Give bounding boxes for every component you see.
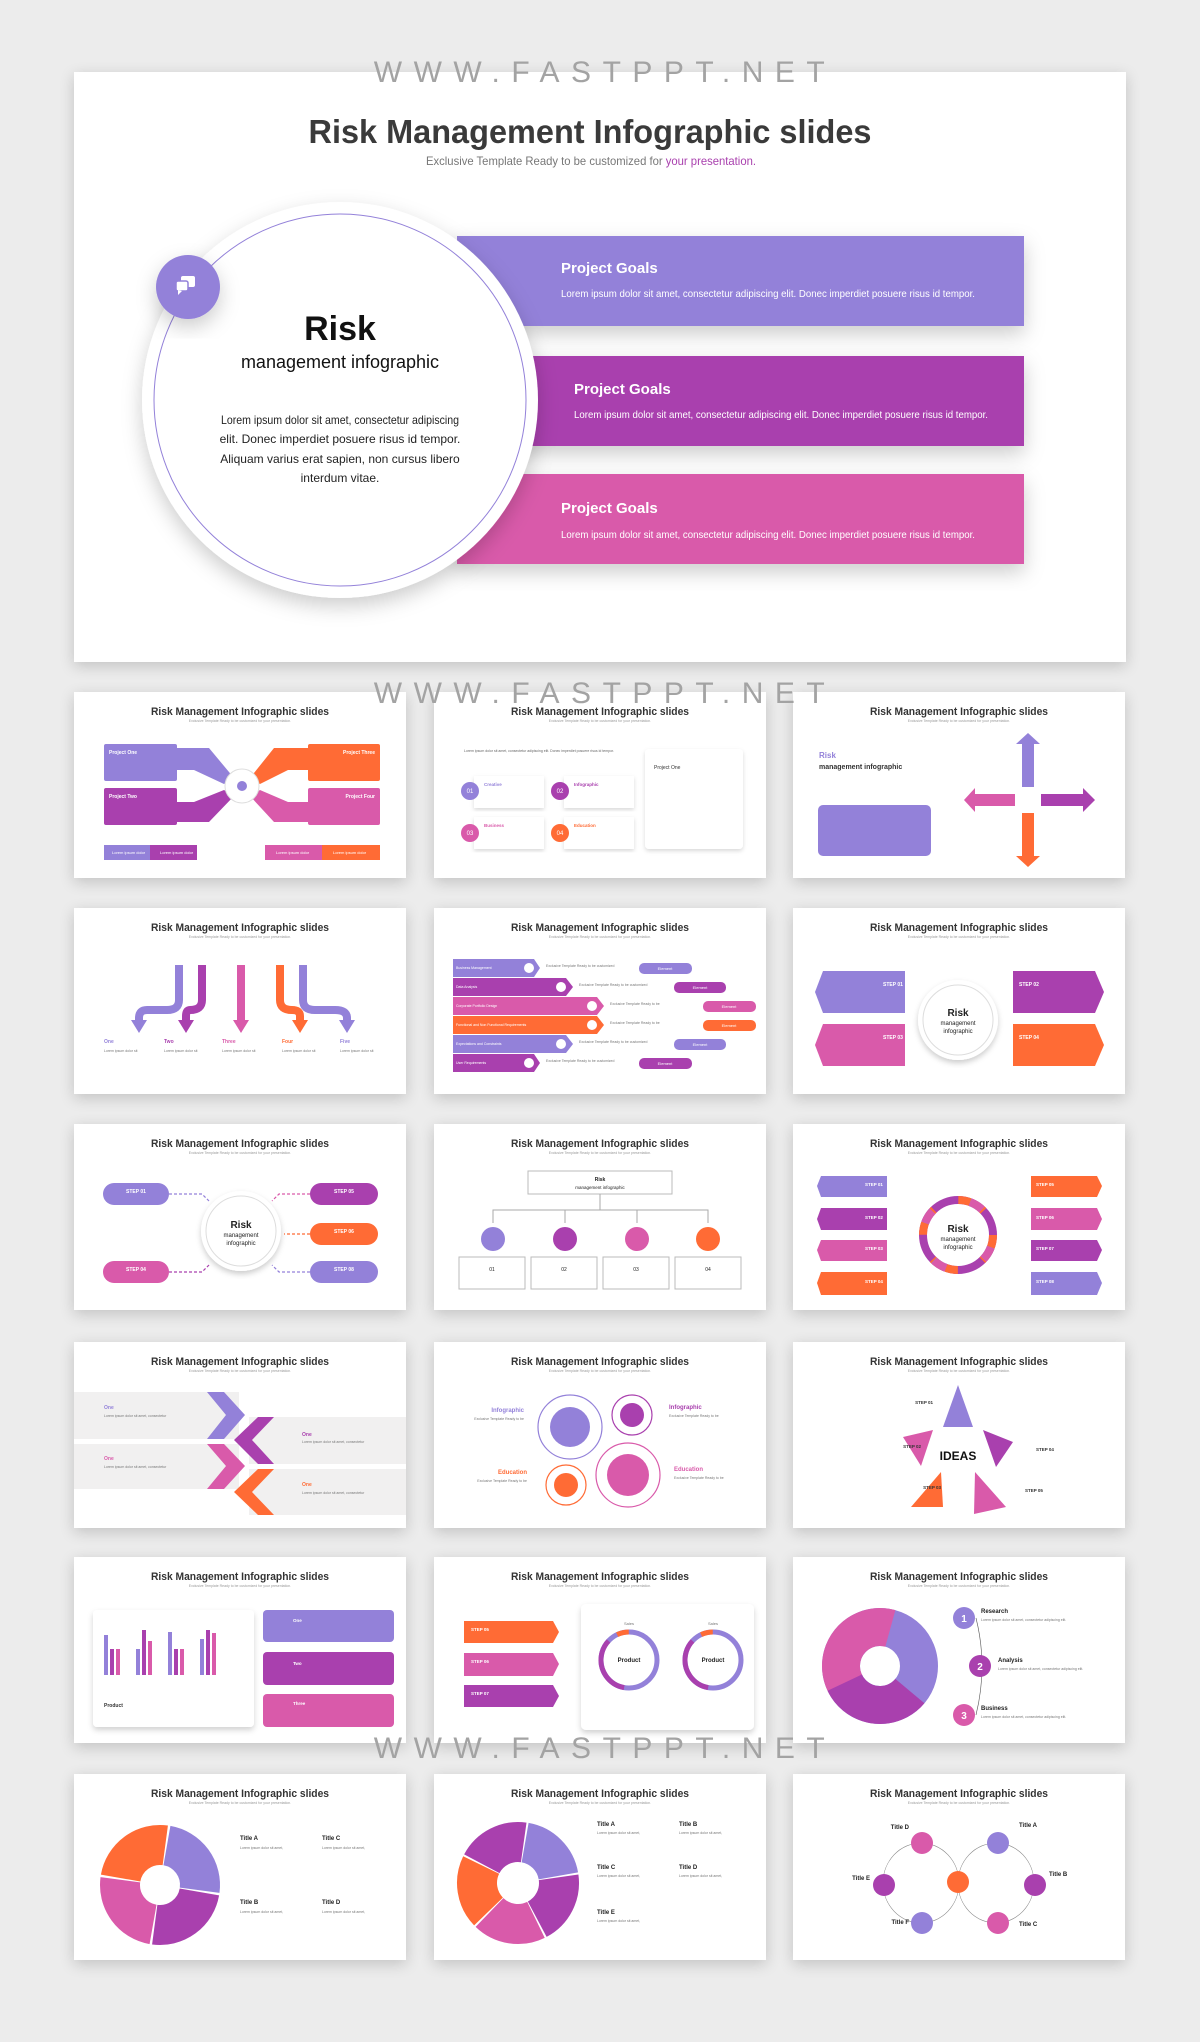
thumb 2: creative cards: Exclusive Template Ready to be customized for your presentation. — [549, 719, 651, 723]
thumb 4: ribbon arrows: Three — [222, 1039, 236, 1045]
thumb 13: bar chart: Risk Management Infographic slides — [151, 1571, 329, 1583]
thumb 18: figure-eight nodes: Title D — [891, 1825, 910, 1831]
central circle: management infographic — [241, 352, 439, 372]
thumb 7: steps pills around circle: STEP 01 — [126, 1189, 146, 1195]
bar: project goals 3: Lorem ipsum dolor sit amet, consectetur adipiscing elit. Donec imperdiet posuere risus id tempor. — [561, 529, 975, 541]
thumb 18: figure-eight nodes — [793, 1774, 1125, 1960]
thumb 3: cross arrows — [793, 692, 1125, 878]
thumb 14: donuts product: STEP 06 — [471, 1659, 489, 1664]
bar: project goals 2: Lorem ipsum dolor sit amet, consectetur adipiscing elit. Donec imperdiet posuere risus id tempor. — [574, 409, 988, 421]
thumb 2: creative cards: Risk Management Infographic slides — [511, 706, 689, 718]
bar: project goals 2 — [457, 356, 1024, 446]
central circle: Lorem ipsum dolor sit amet, consectetur adipiscing — [221, 413, 459, 427]
thumb 16: 4-segment cycle: Title C — [322, 1836, 341, 1842]
thumb 12: ideas: STEP 01 — [915, 1400, 933, 1405]
thumb 11: circles infographic education: Education — [498, 1470, 527, 1476]
thumb 4: ribbon arrows: Lorem ipsum dolor sit — [222, 1049, 255, 1053]
thumb 5: horizontal bars: Expectations and Constraints — [456, 1042, 502, 1046]
thumb 10: chevrons with bands: One — [104, 1456, 114, 1462]
thumb 14: donuts product: Sales — [708, 1621, 718, 1626]
thumb 5: horizontal bars — [434, 908, 766, 1094]
thumb 4: ribbon arrows: One — [104, 1039, 114, 1045]
thumb 1: project one-four: Risk Management Infographic slides — [151, 706, 329, 718]
central circle: elit. Donec imperdiet posuere risus id tempor. — [220, 432, 460, 446]
thumb 14: donuts product: STEP 05 — [471, 1627, 489, 1632]
thumb 13: bar chart: Product — [104, 1703, 123, 1709]
thumb 1: project one-four: Lorem ipsum dolor — [112, 850, 146, 855]
thumb 11: circles infographic education: Exclusive Template Ready to be — [669, 1414, 719, 1418]
thumb 2: creative cards: Creative — [484, 782, 502, 787]
bar: project goals 3: Project Goals — [561, 500, 658, 517]
bar: project goals 3 — [457, 474, 1024, 564]
thumb 7: steps pills around circle: management — [223, 1233, 259, 1239]
thumb 14: donuts product: Product — [702, 1658, 724, 1664]
thumb 5: horizontal bars: Element — [658, 1061, 673, 1066]
thumb 12: ideas: Exclusive Template Ready to be customized for your presentation. — [908, 1369, 1010, 1373]
thumb 7: steps pills around circle: STEP 04 — [126, 1267, 146, 1273]
thumb 11: circles infographic education: Education — [674, 1467, 703, 1473]
thumb 14: donuts product: Exclusive Template Ready to be customized for your presentation. — [549, 1584, 651, 1588]
thumb 3: cross arrows: Risk — [819, 751, 836, 760]
main slide — [74, 72, 1126, 662]
thumb 4: ribbon arrows — [74, 908, 406, 1094]
thumb 7: steps pills around circle: Risk — [230, 1220, 252, 1231]
thumb 9: ring with 8 steps: STEP 07 — [1036, 1246, 1054, 1251]
thumb 1: project one-four: Exclusive Template Ready to be customized for your presentation. — [189, 719, 291, 723]
thumb 6: steps hexagons: Risk — [947, 1008, 969, 1019]
thumb 14: donuts product: Risk Management Infographic slides — [511, 1571, 689, 1583]
thumb 9: ring with 8 steps: STEP 04 — [865, 1279, 883, 1284]
thumb 9: ring with 8 steps: STEP 03 — [865, 1246, 883, 1251]
thumb 10: chevrons with bands: Lorem ipsum dolor sit amet, consectetur — [302, 1491, 365, 1495]
icon: chat bubbles — [156, 255, 220, 319]
thumb 8: tree chart: Risk — [595, 1177, 605, 1183]
thumb 2: creative cards: Project One — [654, 765, 681, 771]
thumb 6: steps hexagons: STEP 01 — [883, 982, 903, 988]
thumb 9: ring with 8 steps: Risk Management Infographic slides — [870, 1138, 1048, 1150]
thumb 12: ideas: Risk Management Infographic slides — [870, 1356, 1048, 1368]
thumb 11: circles infographic education: Exclusive Template Ready to be — [477, 1479, 527, 1483]
thumb 11: circles infographic education — [434, 1342, 766, 1528]
thumb 3: cross arrows: Risk Management Infographic slides — [870, 706, 1048, 718]
thumb 2: creative cards: 01 — [467, 789, 474, 795]
thumb 2: creative cards — [434, 692, 766, 878]
central circle: Aliquam varius erat sapien, non cursus libero — [220, 452, 460, 466]
thumb 13: bar chart: Three — [293, 1701, 306, 1706]
thumb 10: chevrons with bands: One — [302, 1482, 312, 1488]
thumb 11: circles infographic education: Infographic — [669, 1405, 702, 1411]
thumb 17: 5-segment cycle: Exclusive Template Ready to be customized for your presentation. — [549, 1801, 651, 1805]
thumb 15: cycle research analysis business: Lorem ipsum dolor sit amet, consectetur adipiscing elit. — [981, 1618, 1066, 1622]
thumb 9: ring with 8 steps: STEP 08 — [1036, 1279, 1054, 1284]
thumb 17: 5-segment cycle: Title E — [597, 1910, 615, 1916]
thumb 2: creative cards: 04 — [557, 831, 564, 837]
thumb 12: ideas: STEP 03 — [923, 1485, 941, 1490]
thumb 13: bar chart: One — [293, 1618, 302, 1623]
thumb 8: tree chart: 02 — [561, 1267, 567, 1273]
thumb 17: 5-segment cycle: Lorem ipsum dolor sit amet, — [679, 1874, 722, 1878]
thumb 11: circles infographic education: Risk Management Infographic slides — [511, 1356, 689, 1368]
thumb 5: horizontal bars: Element — [693, 985, 708, 990]
thumb 8: tree chart: Risk Management Infographic slides — [511, 1138, 689, 1150]
thumb 10: chevrons with bands — [74, 1342, 406, 1528]
thumb 14: donuts product — [434, 1557, 766, 1743]
thumb 9: ring with 8 steps: management — [940, 1237, 976, 1243]
thumb 10: chevrons with bands: Exclusive Template Ready to be customized for your presentation. — [189, 1369, 291, 1373]
thumb 12: ideas: IDEAS — [940, 1449, 976, 1463]
central circle: interdum vitae. — [301, 471, 379, 485]
thumb 5: horizontal bars: Business Management — [456, 966, 492, 970]
thumb 4: ribbon arrows: Lorem ipsum dolor sit — [282, 1049, 315, 1053]
thumb 16: 4-segment cycle: Risk Management Infographic slides — [151, 1788, 329, 1800]
thumb 10: chevrons with bands: Risk Management Infographic slides — [151, 1356, 329, 1368]
thumb 6: steps hexagons: STEP 04 — [1019, 1035, 1039, 1041]
thumb 5: horizontal bars: User Requirements — [456, 1061, 486, 1065]
thumb 6: steps hexagons: STEP 03 — [883, 1035, 903, 1041]
title: Risk Management Infographic slides — [308, 113, 872, 150]
thumb 15: cycle research analysis business: 2 — [977, 1662, 983, 1673]
thumb 10: chevrons with bands: One — [104, 1405, 114, 1411]
thumb 6: steps hexagons: STEP 02 — [1019, 982, 1039, 988]
thumb 10: chevrons with bands: Lorem ipsum dolor sit amet, consectetur — [302, 1440, 365, 1444]
watermark bottom: WWW.FASTPPT.NET — [374, 1732, 836, 1765]
thumb 16: 4-segment cycle: Title B — [240, 1900, 259, 1906]
thumb 7: steps pills around circle: STEP 05 — [334, 1189, 354, 1195]
watermark top: WWW.FASTPPT.NET — [374, 56, 836, 89]
bar: project goals 1: Lorem ipsum dolor sit amet, consectetur adipiscing elit. Donec imperdiet posuere risus id tempor. — [561, 288, 975, 300]
thumb 18: figure-eight nodes: Title B — [1049, 1872, 1068, 1878]
thumb 1: project one-four: Lorem ipsum dolor — [160, 850, 194, 855]
thumb 5: horizontal bars: Exclusive Template Ready to be — [610, 1021, 660, 1025]
thumb 4: ribbon arrows: Lorem ipsum dolor sit — [104, 1049, 137, 1053]
thumb 1: project one-four — [74, 692, 406, 878]
thumb 9: ring with 8 steps: STEP 02 — [865, 1215, 883, 1220]
thumb 5: horizontal bars: Data Analysis — [456, 985, 477, 989]
thumb 8: tree chart: management infographic — [575, 1185, 626, 1190]
thumb 7: steps pills around circle: infographic — [226, 1241, 256, 1247]
thumb 4: ribbon arrows: Lorem ipsum dolor sit — [164, 1049, 197, 1053]
thumb 17: 5-segment cycle — [434, 1774, 766, 1960]
thumb 15: cycle research analysis business — [793, 1557, 1125, 1743]
thumb 16: 4-segment cycle: Title A — [240, 1836, 259, 1842]
thumb 9: ring with 8 steps: infographic — [943, 1245, 973, 1251]
thumb 7: steps pills around circle — [74, 1124, 406, 1310]
thumb 18: figure-eight nodes: Title E — [852, 1876, 870, 1882]
thumb 10: chevrons with bands: Lorem ipsum dolor sit amet, consectetur — [104, 1414, 167, 1418]
thumb 7: steps pills around circle: Exclusive Template Ready to be customized for your presentation. — [189, 1151, 291, 1155]
thumb 17: 5-segment cycle: Title D — [679, 1865, 698, 1871]
thumb 5: horizontal bars: Exclusive Template Ready to be customized — [579, 983, 647, 987]
thumb 9: ring with 8 steps: Exclusive Template Ready to be customized for your presentation. — [908, 1151, 1010, 1155]
bar: project goals 2: Project Goals — [574, 381, 671, 398]
thumb 9: ring with 8 steps: Risk — [947, 1224, 969, 1235]
thumb 4: ribbon arrows: Five — [340, 1039, 350, 1045]
thumb 15: cycle research analysis business: Risk Management Infographic slides — [870, 1571, 1048, 1583]
thumb 8: tree chart: 01 — [489, 1267, 495, 1273]
thumb 1: project one-four: Project Three — [343, 750, 375, 756]
thumb 4: ribbon arrows: Exclusive Template Ready to be customized for your presentation. — [189, 935, 291, 939]
thumb 16: 4-segment cycle — [74, 1774, 406, 1960]
thumb 12: ideas: STEP 04 — [1036, 1447, 1054, 1452]
thumb 1: project one-four: Project Two — [109, 794, 137, 800]
bar: project goals 1 — [457, 236, 1024, 326]
thumb 7: steps pills around circle: Risk Management Infographic slides — [151, 1138, 329, 1150]
thumb 17: 5-segment cycle: Title B — [679, 1822, 698, 1828]
thumb 17: 5-segment cycle: Lorem ipsum dolor sit amet, — [597, 1874, 640, 1878]
thumb 9: ring with 8 steps: STEP 01 — [865, 1182, 883, 1187]
thumb 11: circles infographic education: Exclusive Template Ready to be — [674, 1476, 724, 1480]
thumb 16: 4-segment cycle: Exclusive Template Ready to be customized for your presentation. — [189, 1801, 291, 1805]
thumb 14: donuts product: Sales — [624, 1621, 634, 1626]
watermark middle: WWW.FASTPPT.NET — [374, 677, 836, 710]
thumb 5: horizontal bars: Element — [658, 966, 673, 971]
thumb 1: project one-four: Project Four — [346, 794, 375, 800]
thumb 5: horizontal bars: Exclusive Template Ready to be customized — [546, 1059, 614, 1063]
thumb 5: horizontal bars: Element — [693, 1042, 708, 1047]
thumb 15: cycle research analysis business: Lorem ipsum dolor sit amet, consectetur adipiscing elit. — [998, 1667, 1083, 1671]
thumb 15: cycle research analysis business: Research — [981, 1609, 1008, 1615]
thumb 15: cycle research analysis business: Exclusive Template Ready to be customized for your presentation. — [908, 1584, 1010, 1588]
thumb 10: chevrons with bands: Lorem ipsum dolor sit amet, consectetur — [104, 1465, 167, 1469]
thumb 17: 5-segment cycle: Risk Management Infographic slides — [511, 1788, 689, 1800]
thumb 2: creative cards: 03 — [467, 831, 474, 837]
thumb 17: 5-segment cycle: Title A — [597, 1822, 616, 1828]
thumb 5: horizontal bars: Element — [722, 1023, 737, 1028]
thumb 5: horizontal bars: Exclusive Template Ready to be customized for your presentation. — [549, 935, 651, 939]
thumb 18: figure-eight nodes: Title C — [1019, 1922, 1038, 1928]
thumb 5: horizontal bars: Functional and Non Functional Requirements — [456, 1023, 526, 1027]
thumb 16: 4-segment cycle: Lorem ipsum dolor sit amet, — [240, 1910, 283, 1914]
thumb 15: cycle research analysis business: 1 — [961, 1614, 967, 1625]
thumb 8: tree chart: Exclusive Template Ready to be customized for your presentation. — [549, 1151, 651, 1155]
thumb 17: 5-segment cycle: Lorem ipsum dolor sit amet, — [597, 1831, 640, 1835]
thumb 12: ideas: STEP 02 — [903, 1444, 921, 1449]
thumb 2: creative cards: Infographic — [574, 782, 599, 787]
thumb 14: donuts product: STEP 07 — [471, 1691, 489, 1696]
thumb 1: project one-four: Lorem ipsum dolor — [333, 850, 367, 855]
thumb 17: 5-segment cycle: Lorem ipsum dolor sit amet, — [679, 1831, 722, 1835]
bar: project goals 1: Project Goals — [561, 260, 658, 277]
thumb 3: cross arrows: management infographic — [819, 764, 902, 771]
thumb 2: creative cards: Education — [574, 823, 596, 828]
thumb 6: steps hexagons — [793, 908, 1125, 1094]
thumb 16: 4-segment cycle: Lorem ipsum dolor sit amet, — [240, 1846, 283, 1850]
thumb 15: cycle research analysis business: Lorem ipsum dolor sit amet, consectetur adipiscing elit. — [981, 1715, 1066, 1719]
thumb 11: circles infographic education: Exclusive Template Ready to be — [474, 1417, 524, 1421]
thumb 16: 4-segment cycle: Lorem ipsum dolor sit amet, — [322, 1910, 365, 1914]
thumb 4: ribbon arrows: Two — [164, 1039, 174, 1045]
thumb 5: horizontal bars: Element — [722, 1004, 737, 1009]
thumb 7: steps pills around circle: STEP 06 — [334, 1229, 354, 1235]
subtitle: Exclusive Template Ready to be customized for your presentation. — [426, 154, 756, 168]
thumb 6: steps hexagons: management — [940, 1021, 976, 1027]
thumb 12: ideas: STEP 05 — [1025, 1488, 1043, 1493]
thumb 6: steps hexagons: infographic — [943, 1029, 973, 1035]
thumb 4: ribbon arrows: Risk Management Infographic slides — [151, 922, 329, 934]
thumb 5: horizontal bars: Risk Management Infographic slides — [511, 922, 689, 934]
thumb 5: horizontal bars: Corporate Portfolio Design — [456, 1004, 497, 1008]
thumb 3: cross arrows: Exclusive Template Ready to be customized for your presentation. — [908, 719, 1010, 723]
thumb 2: creative cards: Business — [484, 823, 505, 828]
thumb 8: tree chart: 03 — [633, 1267, 639, 1273]
thumb 15: cycle research analysis business: 3 — [961, 1711, 967, 1722]
thumb 17: 5-segment cycle: Lorem ipsum dolor sit amet, — [597, 1919, 640, 1923]
thumb 11: circles infographic education: Infographic — [491, 1408, 525, 1414]
thumb 12: ideas — [793, 1342, 1125, 1528]
thumb 18: figure-eight nodes: Risk Management Infographic slides — [870, 1788, 1048, 1800]
thumb 9: ring with 8 steps — [793, 1124, 1125, 1310]
thumb 6: steps hexagons: Risk Management Infographic slides — [870, 922, 1048, 934]
thumb 7: steps pills around circle: STEP 08 — [334, 1267, 354, 1273]
thumb 10: chevrons with bands: One — [302, 1432, 312, 1438]
thumb 17: 5-segment cycle: Title C — [597, 1865, 616, 1871]
thumb 13: bar chart — [74, 1557, 406, 1743]
thumb 18: figure-eight nodes: Exclusive Template Ready to be customized for your presentation. — [908, 1801, 1010, 1805]
thumb 5: horizontal bars: Exclusive Template Ready to be — [610, 1002, 660, 1006]
thumb 13: bar chart: Two — [293, 1661, 302, 1666]
thumb 8: tree chart: 04 — [705, 1267, 711, 1273]
thumb 6: steps hexagons: Exclusive Template Ready to be customized for your presentation. — [908, 935, 1010, 939]
thumb 1: project one-four: Lorem ipsum dolor — [276, 850, 310, 855]
thumb 5: horizontal bars: Exclusive Template Ready to be customized — [579, 1040, 647, 1044]
thumb 1: project one-four: Project One — [109, 750, 137, 756]
thumb 11: circles infographic education: Exclusive Template Ready to be customized for your presentation. — [549, 1369, 651, 1373]
thumb 8: tree chart — [434, 1124, 766, 1310]
thumb 15: cycle research analysis business: Business — [981, 1706, 1008, 1712]
thumb 13: bar chart: Exclusive Template Ready to be customized for your presentation. — [189, 1584, 291, 1588]
thumb 18: figure-eight nodes: Title F — [891, 1920, 909, 1926]
thumb 18: figure-eight nodes: Title A — [1019, 1823, 1038, 1829]
thumb 9: ring with 8 steps: STEP 06 — [1036, 1215, 1054, 1220]
central circle — [142, 202, 538, 598]
thumb 2: creative cards: Lorem ipsum dolor sit amet, consectetur adipiscing elit. Donec imperdiet posuere risus id tempor. — [464, 749, 614, 753]
thumb 15: cycle research analysis business: Analysis — [998, 1658, 1023, 1664]
thumb 4: ribbon arrows: Lorem ipsum dolor sit — [340, 1049, 373, 1053]
thumb 14: donuts product: Product — [618, 1658, 640, 1664]
thumb 4: ribbon arrows: Four — [282, 1039, 293, 1045]
thumb 16: 4-segment cycle: Title D — [322, 1900, 341, 1906]
central circle: Risk — [304, 310, 376, 348]
thumb 5: horizontal bars: Exclusive Template Ready to be customized — [546, 964, 614, 968]
thumb 2: creative cards: 02 — [557, 789, 564, 795]
thumb 16: 4-segment cycle: Lorem ipsum dolor sit amet, — [322, 1846, 365, 1850]
thumb 9: ring with 8 steps: STEP 05 — [1036, 1182, 1054, 1187]
